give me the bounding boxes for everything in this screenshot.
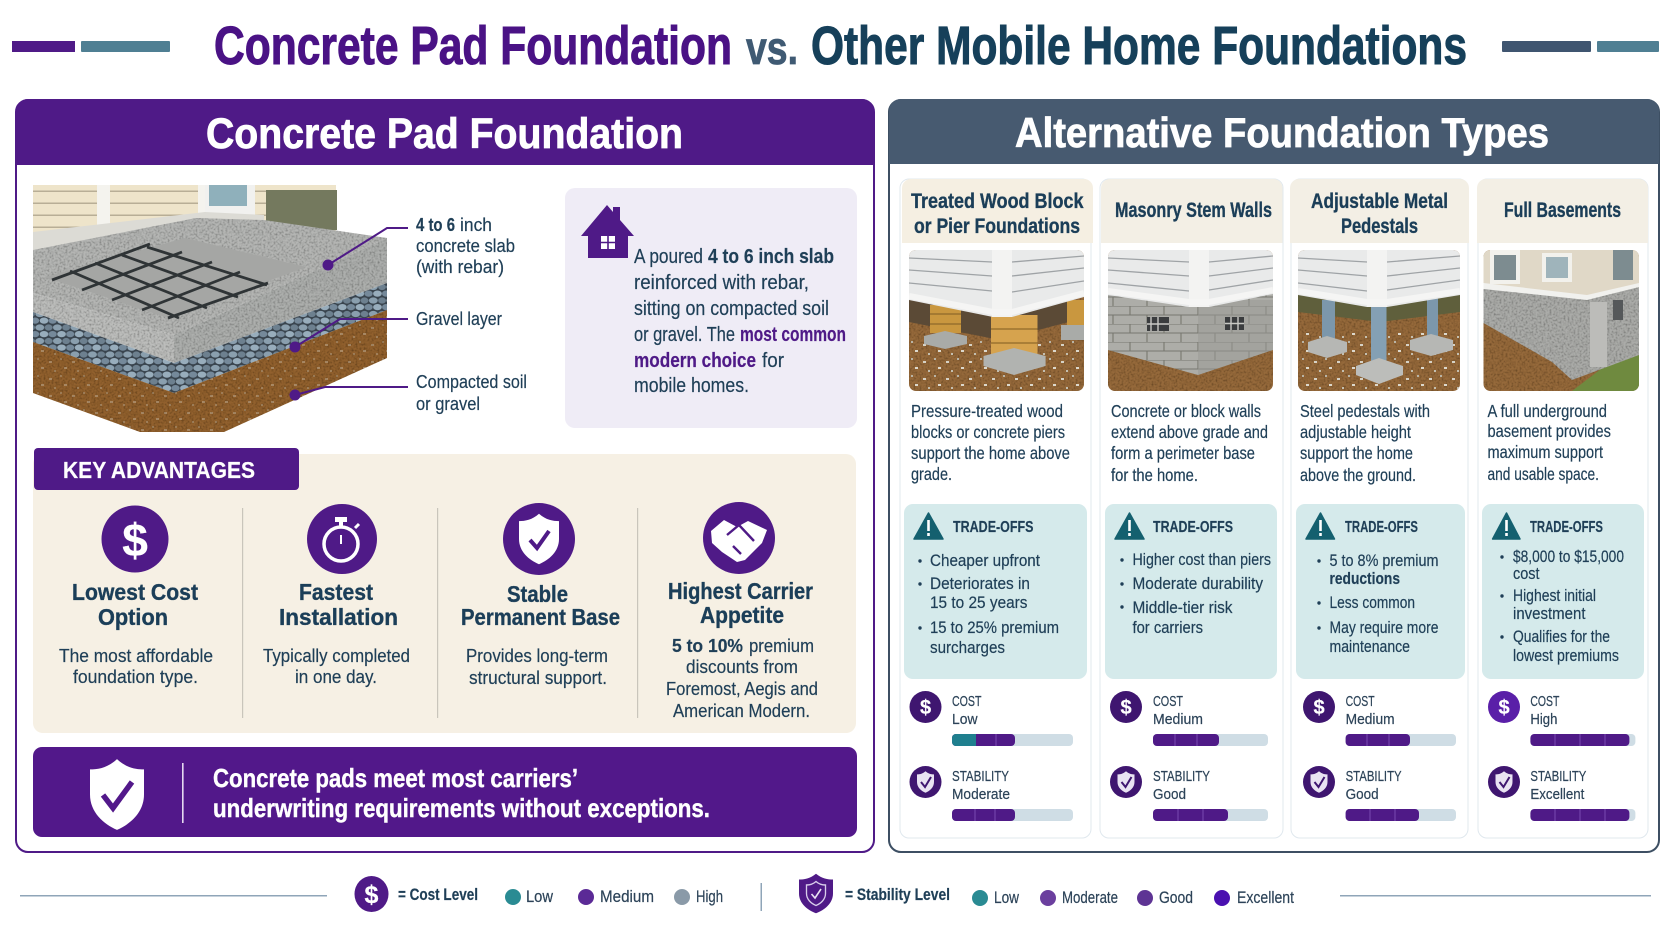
rating: cost medium: $ <box>1120 697 1132 719</box>
trade-offs: cost <box>1513 565 1540 583</box>
description text: mobile homes. <box>634 375 749 397</box>
rating: cost low: $ <box>920 697 931 719</box>
rating: stability moderate: Moderate <box>952 787 1010 803</box>
tag: key advantages: KEY ADVANTAGES <box>63 457 255 483</box>
advantage: highest carrier appetite: Highest Carrier <box>668 578 813 604</box>
illustration: slab cross-section <box>33 185 387 432</box>
trade-offs <box>1105 504 1277 679</box>
key advantages section <box>33 448 856 733</box>
rating: cost medium <box>1303 691 1456 746</box>
legend: cost level: Medium <box>600 888 654 906</box>
description: support the home above <box>911 443 1070 463</box>
legend: stability level: Moderate <box>1062 889 1118 907</box>
column title <box>1477 179 1648 243</box>
trade-offs: Qualifies for the <box>1513 628 1610 646</box>
legend: cost level: Low <box>526 888 553 906</box>
trade-offs: Highest initial <box>1513 587 1596 605</box>
rating: stability moderate <box>910 766 1073 821</box>
legend <box>20 874 1651 913</box>
advantage: stable permanent base <box>461 503 620 688</box>
column title: Masonry Stem Walls <box>1115 199 1272 222</box>
column: full basements <box>1477 179 1648 838</box>
trade-offs: Moderate durability <box>1132 575 1264 593</box>
description <box>911 401 1070 484</box>
banner: underwriting <box>33 747 857 837</box>
description: and usable space. <box>1488 464 1599 484</box>
rating: stability good <box>1303 766 1456 821</box>
description text: 4 to 6 inch slab <box>708 246 834 268</box>
advantage: fastest installation <box>263 504 410 687</box>
legend: stability level: Good <box>1159 889 1193 907</box>
advantage: highest carrier appetite: Foremost, Aegis and <box>666 678 818 699</box>
description: grade. <box>911 464 952 484</box>
label: concrete slab: 4 to 6 <box>416 214 455 235</box>
advantage: fastest installation: Fastest <box>299 579 373 605</box>
trade-offs: TRADE-OFFS <box>1345 519 1418 536</box>
banner text: underwriting requirements without exceptions. <box>213 793 710 823</box>
legend: stability level: Low <box>994 889 1019 907</box>
legend: cost level: $ <box>365 881 379 909</box>
advantage: highest carrier appetite: premium <box>749 635 814 656</box>
description: basement provides <box>1488 421 1611 441</box>
trade-offs: TRADE-OFFS <box>1153 519 1233 536</box>
advantage: stable permanent base: Stable <box>507 581 568 607</box>
page title: Other Mobile Home Foundations <box>811 16 1467 76</box>
trade-offs: maintenance <box>1330 638 1410 656</box>
legend: cost level: = Cost Level <box>398 886 478 904</box>
trade-offs: for carriers <box>1132 619 1203 637</box>
trade-offs: 15 to 25 years <box>930 594 1028 612</box>
legend: stability level <box>799 874 1294 913</box>
rating: stability good: STABILITY <box>1153 769 1210 785</box>
column: adjustable metal pedestals <box>1290 179 1469 838</box>
panel: alternative foundation types <box>889 99 1659 852</box>
advantage: lowest cost: foundation type. <box>73 666 198 687</box>
description text: sitting on compacted soil <box>634 298 829 320</box>
icon: warning <box>914 513 943 539</box>
column title: Full Basements <box>1504 199 1621 222</box>
page title <box>214 16 1467 76</box>
description: form a perimeter base <box>1111 443 1255 463</box>
trade-offs <box>904 504 1087 679</box>
description <box>1488 401 1611 484</box>
description: adjustable height <box>1300 422 1411 442</box>
description text: or gravel. The <box>634 324 735 346</box>
rating: cost low: COST <box>952 694 982 710</box>
description: Pressure-treated wood <box>911 401 1063 421</box>
trade-offs: TRADE-OFFS <box>1530 519 1603 536</box>
description: extend above grade and <box>1111 422 1268 442</box>
trade-offs: Less common <box>1330 594 1415 612</box>
column title: or Pier Foundations <box>914 215 1080 238</box>
trade-offs: investment <box>1513 605 1586 623</box>
description: Steel pedestals with <box>1300 401 1430 421</box>
image: wood piers <box>909 250 1084 391</box>
image: masonry wall <box>1108 250 1273 391</box>
icon: shield <box>90 759 144 830</box>
panel heading: Alternative Foundation Types <box>1015 109 1549 156</box>
rating: stability excellent: Excellent <box>1530 787 1584 803</box>
trade-offs: Deteriorates in <box>930 575 1030 593</box>
description: A full underground <box>1488 401 1607 421</box>
rating: cost high: $ <box>1498 697 1510 719</box>
column title <box>1101 179 1282 243</box>
panel heading: Concrete Pad Foundation <box>206 110 683 158</box>
image: metal pedestals <box>1298 250 1460 391</box>
advantage: lowest cost: Lowest Cost <box>72 579 198 605</box>
trade-offs: 5 to 8% premium <box>1330 552 1438 570</box>
page title: vs. <box>746 22 798 74</box>
rating: stability excellent <box>1488 766 1635 821</box>
trade-offs: Cheaper upfront <box>930 552 1040 570</box>
advantage: lowest cost: Option <box>98 604 168 630</box>
advantage: stable permanent base: structural support. <box>469 667 607 688</box>
advantage: lowest cost: The most affordable <box>59 645 213 666</box>
label: concrete slab: inch <box>460 214 492 235</box>
description: blocks or concrete piers <box>911 422 1065 442</box>
advantage: lowest cost <box>59 506 213 687</box>
column title: Pedestals <box>1341 215 1418 238</box>
rating: cost low: Low <box>952 712 978 728</box>
column: treated wood block <box>900 179 1093 838</box>
rating: cost high: COST <box>1530 694 1560 710</box>
trade-offs <box>1296 504 1465 679</box>
label: concrete slab: concrete slab <box>416 235 515 256</box>
advantage: fastest installation: in one day. <box>295 666 377 687</box>
advantage: lowest cost: $ <box>122 514 148 566</box>
description <box>1111 401 1268 485</box>
label: compacted soil: or gravel <box>416 393 480 414</box>
tag: key advantages <box>34 448 299 490</box>
description text <box>634 246 846 397</box>
column title: Adjustable Metal <box>1311 190 1448 213</box>
trade-offs: $8,000 to $15,000 <box>1513 548 1624 566</box>
trade-offs: Higher cost than piers <box>1132 551 1271 569</box>
rating: cost low <box>910 691 1073 746</box>
rating: cost medium: Medium <box>1153 712 1203 728</box>
trade-offs: surcharges <box>930 639 1005 657</box>
description text: A poured <box>634 246 703 268</box>
trade-offs: lowest premiums <box>1513 647 1619 665</box>
advantage: stable permanent base: Provides long-term <box>466 645 608 666</box>
banner text: Concrete pads meet most carriers’ <box>213 763 578 793</box>
label: concrete slab <box>416 214 515 277</box>
legend: stability level: = Stability Level <box>845 886 950 904</box>
description text: reinforced with rebar, <box>634 272 809 294</box>
legend: stability level: Excellent <box>1237 889 1294 907</box>
callout lines <box>290 228 408 400</box>
rating: cost medium: $ <box>1313 697 1325 719</box>
description text: most common <box>740 324 846 346</box>
label: compacted soil: Compacted soil <box>416 371 527 392</box>
advantage: highest carrier appetite: Appetite <box>700 602 784 628</box>
trade-offs <box>1482 504 1644 679</box>
advantage: highest carrier appetite: American Modern. <box>673 700 810 721</box>
label: concrete slab: (with rebar) <box>416 256 504 277</box>
description text: modern choice <box>634 350 756 372</box>
panel: concrete pad foundation <box>16 99 874 852</box>
column title: Treated Wood Block <box>911 190 1084 213</box>
rating: cost medium <box>1110 691 1268 746</box>
rating: stability good: Good <box>1153 787 1186 803</box>
advantage: fastest installation: Typically completed <box>263 645 410 666</box>
description <box>1300 401 1430 485</box>
rating: cost high <box>1488 691 1635 746</box>
description: maximum support <box>1488 442 1603 462</box>
rating: cost medium: COST <box>1153 694 1183 710</box>
advantage: highest carrier appetite: discounts from <box>686 656 798 677</box>
trade-offs: May require more <box>1330 619 1438 637</box>
icon: warning <box>1493 513 1520 539</box>
trade-offs: 15 to 25% premium <box>930 619 1059 637</box>
description: support the home <box>1300 443 1413 463</box>
advantage: highest carrier appetite: 5 to 10% <box>672 635 743 656</box>
rating: stability excellent: STABILITY <box>1530 769 1587 785</box>
rating: cost medium: Medium <box>1346 712 1395 728</box>
label: compacted soil <box>416 371 527 414</box>
icon: house <box>581 205 634 258</box>
column: masonry stem walls <box>1100 179 1283 838</box>
page title: Concrete Pad Foundation <box>214 16 732 76</box>
rating: stability good <box>1110 766 1268 821</box>
rating: cost high: High <box>1530 712 1557 728</box>
column title <box>1290 179 1469 243</box>
description: for the home. <box>1111 465 1198 485</box>
image: full basement <box>1484 250 1640 391</box>
rating: stability good: Good <box>1346 787 1379 803</box>
trade-offs: reductions <box>1330 570 1400 588</box>
rating: stability good: STABILITY <box>1346 769 1402 785</box>
advantage: fastest installation: Installation <box>279 604 398 630</box>
legend: cost level <box>354 876 723 912</box>
icon: warning <box>1306 513 1334 539</box>
advantage: stable permanent base: Permanent Base <box>461 604 620 630</box>
description card <box>565 188 857 428</box>
description text: for <box>762 350 784 372</box>
label: gravel layer: Gravel layer <box>416 308 502 329</box>
rating: stability moderate: STABILITY <box>952 769 1009 785</box>
advantage: highest carrier appetite <box>666 502 818 721</box>
description: above the ground. <box>1300 465 1416 485</box>
column title <box>902 179 1093 243</box>
description: Concrete or block walls <box>1111 401 1261 421</box>
banner text <box>213 763 710 823</box>
legend: cost level: High <box>696 888 723 906</box>
trade-offs: TRADE-OFFS <box>953 519 1034 536</box>
icon: warning <box>1115 513 1144 539</box>
trade-offs: Middle-tier risk <box>1132 599 1233 617</box>
rating: cost medium: COST <box>1346 694 1375 710</box>
